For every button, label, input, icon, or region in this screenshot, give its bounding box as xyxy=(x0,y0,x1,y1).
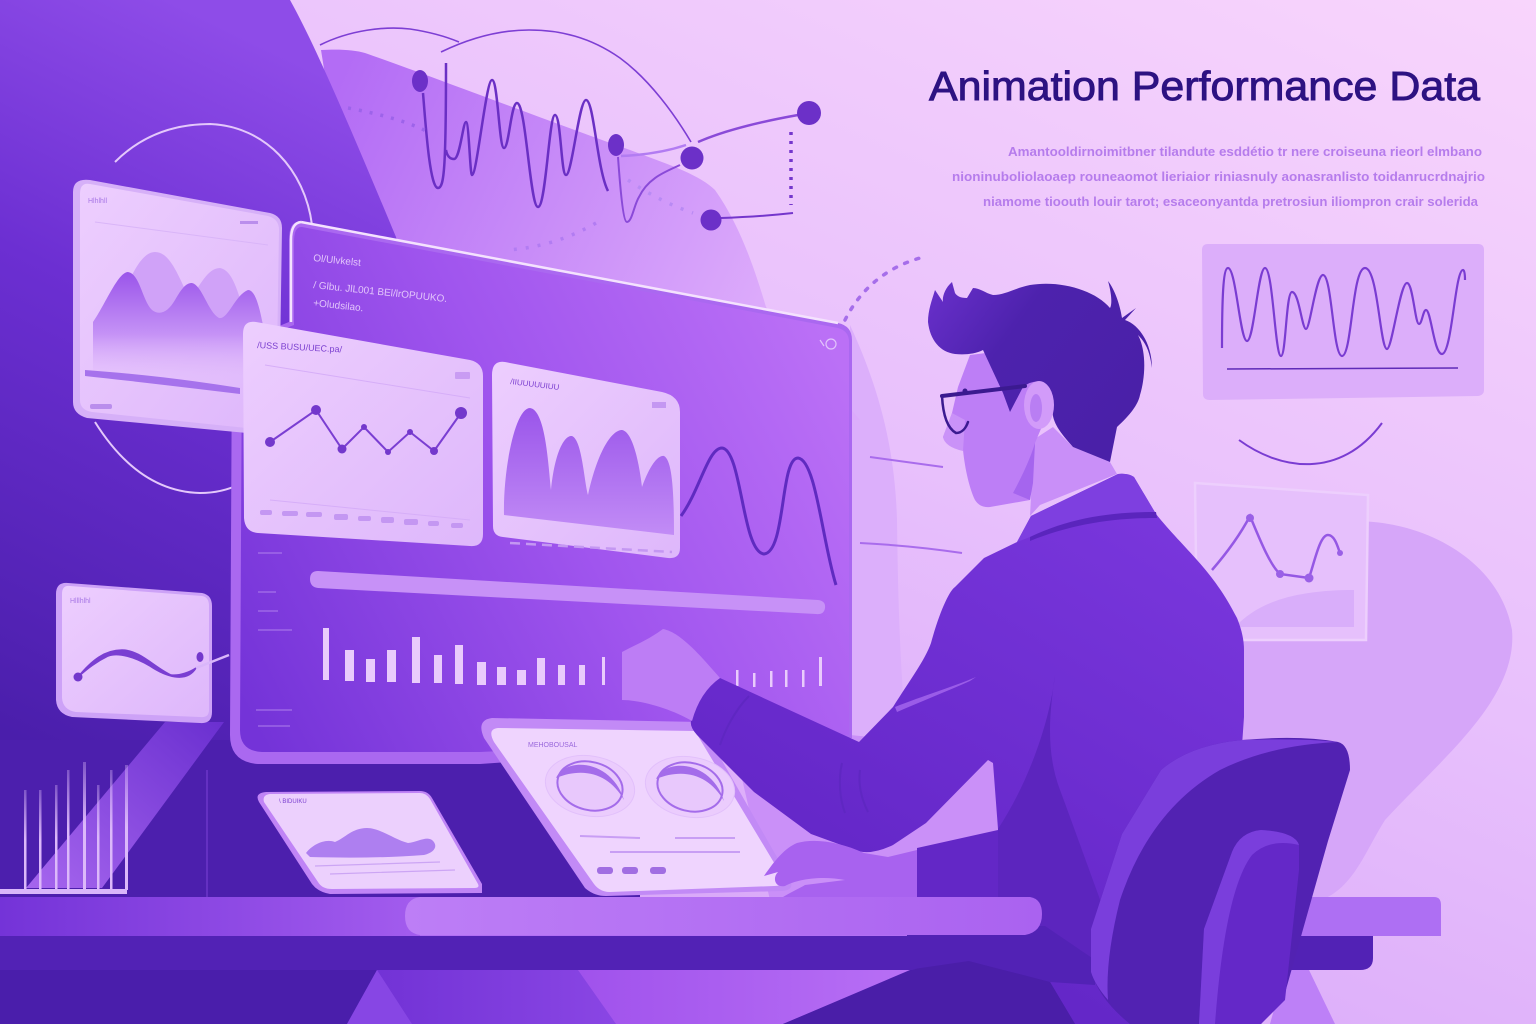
tablet: small area chart xyxy=(258,791,482,894)
tablet: small area chart: \ BIDUIKU xyxy=(279,799,307,805)
hair xyxy=(928,281,1152,462)
waveform xyxy=(423,63,608,207)
lower stripe xyxy=(85,370,240,394)
nose xyxy=(943,413,965,451)
under desk torso shade xyxy=(907,926,1095,985)
cuff seam xyxy=(720,696,749,745)
neck xyxy=(1030,427,1117,516)
slider bar xyxy=(310,571,825,614)
faint vertical divider xyxy=(206,770,208,897)
tablet: gauges xyxy=(481,718,791,896)
motion lines xyxy=(860,457,962,553)
card: left small curve xyxy=(56,583,229,723)
panel icon xyxy=(820,339,836,349)
gauge one xyxy=(540,749,640,823)
panel heading text: / Glbu. JlL001 BEl/lrOPUUKO. xyxy=(313,280,448,305)
panel heading text xyxy=(313,253,448,314)
chair leg wedge xyxy=(1270,970,1335,1024)
card: top-left area chart xyxy=(73,180,282,435)
dotted arc xyxy=(845,258,920,320)
gauge two xyxy=(640,750,740,824)
arm highlight xyxy=(895,677,976,712)
main dashboard panel xyxy=(230,222,852,764)
nodes xyxy=(412,70,821,230)
resting hand xyxy=(764,841,917,897)
desk xyxy=(0,897,1441,970)
card: bottom-right chart xyxy=(1195,483,1368,640)
description text: niamome tioouth louir tarot; esaceonyantda pretrosiun iliompron crair solerida xyxy=(983,194,1479,209)
decorative circle arcs xyxy=(95,124,312,493)
lilac area beside tablet xyxy=(740,735,1000,900)
card: area chart xyxy=(492,362,680,558)
card: line chart: /USS BUSU/UEC.pa/ xyxy=(257,340,343,354)
tablet: gauges: MEHOBOUSAL xyxy=(528,742,578,749)
background shape: behind man xyxy=(850,325,905,760)
legs xyxy=(783,961,1075,1024)
jaw shadow xyxy=(1013,443,1035,500)
description text: Amantooldirnoimitbner tilandute esddétio tr nere croiseuna rieorl elmbano xyxy=(1008,144,1482,159)
lower sleeve xyxy=(917,830,998,899)
card: area chart: /IIUUUUUIUU xyxy=(510,377,560,392)
background shape: lilac wave xyxy=(321,50,860,420)
torso and arm xyxy=(691,474,1244,1024)
panel heading text: Ol/Ulvkelst xyxy=(313,253,362,269)
bars: bottom-left xyxy=(0,762,128,894)
bar chart xyxy=(323,628,822,687)
face xyxy=(943,350,1053,507)
dotted connectors xyxy=(789,132,793,205)
card: top-left area chart: Hlhlhll xyxy=(88,198,108,205)
glasses xyxy=(942,386,1025,433)
card: left small curve: Hlllhlhl xyxy=(70,598,91,605)
front mountains xyxy=(93,272,264,385)
dark wall under panel xyxy=(0,740,640,900)
background blob: right xyxy=(1150,521,1512,905)
card: line chart xyxy=(243,322,483,546)
man xyxy=(622,281,1244,1024)
smile arc xyxy=(1239,423,1382,464)
pointing hand xyxy=(622,629,720,721)
collar shade xyxy=(1030,512,1157,541)
side labels xyxy=(256,553,292,726)
sine line xyxy=(681,448,836,585)
description text: nioninuboliolaoaep rouneaomot lieriaior riniasnuly aonasranlisto toidanrucrdnajrio xyxy=(952,169,1485,184)
collar xyxy=(1017,474,1156,542)
description text xyxy=(952,144,1485,209)
title: Animation Performance Data xyxy=(929,63,1480,109)
card: top-right wave chart xyxy=(1202,244,1484,400)
back mountains xyxy=(120,252,246,330)
ear xyxy=(1024,381,1054,429)
diagonal light band xyxy=(26,722,224,888)
connector lines xyxy=(621,145,686,156)
chair xyxy=(1091,738,1350,1024)
lower wedges xyxy=(0,970,1100,1024)
top line graph with nodes xyxy=(320,28,821,250)
desk front edge xyxy=(405,897,1042,935)
elbow crease xyxy=(840,763,868,813)
torso lower shade xyxy=(998,675,1130,982)
panel heading text: +Oludsilao. xyxy=(313,298,364,314)
background shape: dark left xyxy=(0,0,620,1024)
